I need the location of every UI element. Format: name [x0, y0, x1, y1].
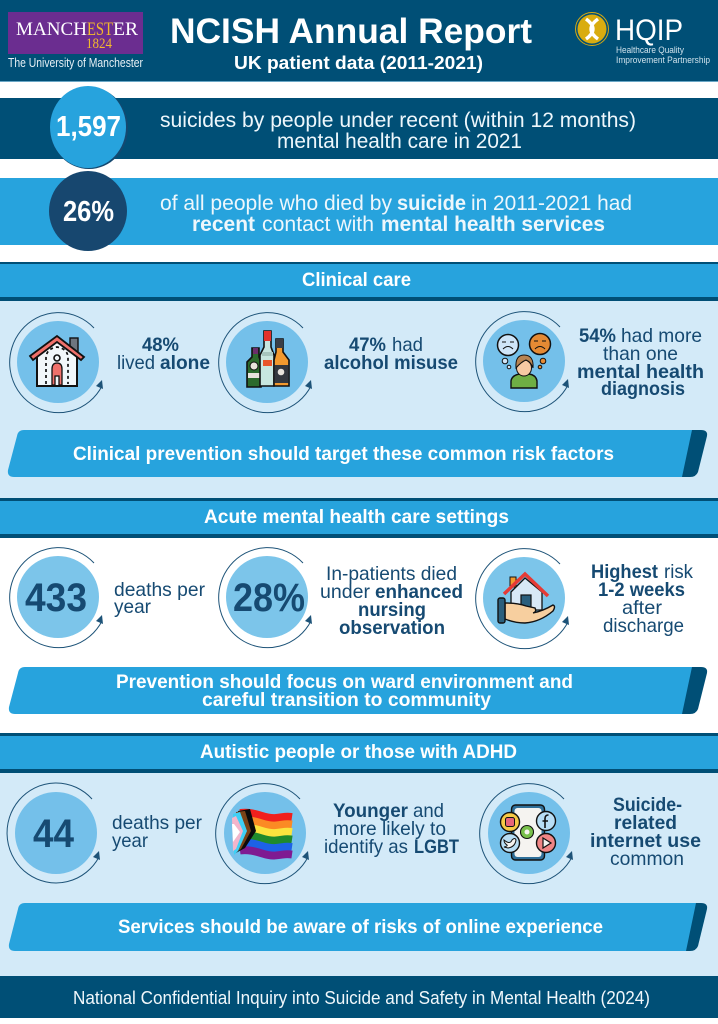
text: deaths per year: year: [112, 830, 148, 852]
callout: online experience: [9, 903, 707, 951]
footer: [0, 976, 718, 1018]
text: in-patients under observation: under: [320, 581, 371, 603]
stat bar: 26% recent contact: [0, 171, 718, 251]
logo: University of Manchester: ER: [113, 19, 138, 40]
text: in-patients under observation: In-patients died: [326, 563, 457, 585]
subtitle: UK patient data (2011-2021): [234, 52, 483, 73]
panel: clinical care: [0, 262, 718, 498]
logo: HQIP: Healthcare Quality: [616, 45, 684, 55]
text: in-patients under observation: observation: [339, 617, 445, 639]
text: suicide-related internet use: related: [614, 812, 677, 834]
text: in-patients under observation: enhanced: [375, 581, 463, 603]
title: NCISH Annual Report: [170, 12, 532, 51]
stat bar: 26% recent contact: mental health services: [381, 213, 605, 236]
callout: clinical prevention: Clinical prevention should target these common risk factors: [73, 443, 614, 465]
callout: ward environment: careful transition to community: [202, 689, 491, 711]
text: in-patients under observation: nursing: [358, 599, 426, 621]
text: suicide-related internet use: internet use: [590, 830, 701, 852]
text: highest risk after discharge: Highest: [591, 561, 658, 583]
stat bar: 26% recent contact: recent: [192, 213, 255, 236]
text: suicide-related internet use: [590, 794, 701, 870]
heading: acute settings: Acute mental health care settings: [204, 506, 509, 528]
stat: 44: [7, 783, 100, 883]
icon: faces above person: [476, 312, 569, 412]
stat: 433: [10, 548, 103, 648]
stat bar: 26% recent contact: 26%: [63, 196, 114, 228]
text: younger LGBT: and: [413, 800, 444, 822]
text: 48% lived alone: alone: [160, 352, 210, 374]
text: younger LGBT: more likely to: [333, 818, 446, 840]
text: 48% lived alone: 48%: [142, 334, 179, 356]
text: deaths per year: [112, 812, 202, 852]
text: 47% alcohol misuse: had: [392, 334, 423, 356]
stat bar: 26% recent contact: contact with: [262, 213, 374, 236]
stat bar: 1,597 suicides: suicides by people under recent (within 12 months): [160, 109, 636, 132]
text: 54% more than one diagnosis: mental health: [577, 361, 704, 383]
heading: autistic people: [0, 733, 718, 773]
callout: ward environment: Prevention should focus on ward environment and: [116, 671, 573, 693]
stat bar: 26% recent contact: of all people who died by: [160, 192, 392, 215]
stat bar: 26% recent contact: suicide: [397, 192, 466, 215]
text: deaths per year: deaths per: [112, 812, 202, 834]
stat: 28%: [219, 548, 312, 648]
text: 48% lived alone: lived: [117, 352, 155, 374]
heading: clinical care: [0, 262, 718, 301]
heading: autistic people: Autistic people or those with ADHD: [200, 741, 517, 763]
stat: 44: 44: [33, 812, 75, 856]
text: highest risk after discharge: 1-2 weeks: [598, 579, 685, 601]
logo: University of Manchester: MANCH: [16, 19, 87, 40]
text: highest risk after discharge: after: [622, 597, 663, 619]
stat bar: 1,597 suicides: [0, 86, 718, 169]
icon: phone with social apps: [480, 784, 573, 884]
header band: [0, 0, 718, 82]
logo: HQIP: [576, 12, 710, 65]
icon: person alone at home: [10, 313, 103, 413]
icon: alcohol bottles: [219, 313, 312, 413]
text: younger LGBT: [324, 800, 459, 858]
callout: ward environment: [9, 667, 707, 714]
logo: University of Manchester: The University of Manchester: [8, 56, 143, 70]
stat bar: 1,597 suicides: mental health care in 2021: [277, 130, 522, 153]
panel: autistic people or those with ADHD: [0, 733, 718, 976]
callout: clinical prevention: [8, 430, 707, 477]
text: 54% more than one diagnosis: than one: [603, 343, 678, 365]
text: in-patients under observation: [320, 563, 463, 639]
panel: acute mental health care settings: [0, 498, 718, 714]
text: suicide-related internet use: common: [610, 848, 684, 870]
text: 54% more than one diagnosis: 54%: [579, 325, 616, 347]
text: highest risk after discharge: risk: [664, 561, 693, 583]
text: deaths per year: year: [114, 596, 151, 618]
logo: University of Manchester: [8, 12, 143, 70]
icon: progress pride flag: [216, 784, 309, 884]
stat: 28%: 28%: [233, 576, 305, 620]
text: highest risk after discharge: [591, 561, 693, 637]
logo: HQIP: HQIP: [615, 14, 683, 47]
heading: clinical care: Clinical care: [302, 269, 411, 291]
stat bar: 26% recent contact: in 2011-2021 had: [471, 192, 632, 215]
heading: acute settings: [0, 498, 718, 538]
footer: National Confidential Inquiry into Suicide and Safety in Mental Health (2024): [73, 988, 650, 1008]
text: younger LGBT: identify as: [324, 836, 408, 858]
text: younger LGBT: Younger: [333, 800, 408, 822]
text: 47% alcohol misuse: alcohol misuse: [324, 352, 458, 374]
text: suicide-related internet use: Suicide-: [613, 794, 682, 816]
text: 54% more than one diagnosis: diagnosis: [601, 378, 685, 400]
text: 54% more than one diagnosis: [577, 325, 704, 400]
stat: 433: 433: [25, 576, 87, 620]
logo: University of Manchester: 1824: [86, 36, 112, 52]
logo: HQIP: Improvement Partnership: [616, 55, 710, 65]
text: 54% more than one diagnosis: had more: [621, 325, 702, 347]
text: younger LGBT: LGBT: [414, 836, 459, 858]
text: highest risk after discharge: discharge: [603, 615, 684, 637]
logo: University of Manchester: EST: [87, 19, 113, 40]
icon: house in hand: [476, 549, 569, 649]
text: deaths per year: [114, 579, 205, 618]
text: deaths per year: deaths per: [114, 579, 205, 601]
text: 47% alcohol misuse: [324, 334, 458, 374]
callout: online experience: Services should be aware of risks of online experience: [118, 916, 603, 938]
text: 48% lived alone: [117, 334, 210, 374]
stat bar: 1,597 suicides: 1,597: [56, 111, 121, 143]
text: 47% alcohol misuse: 47%: [349, 334, 386, 356]
